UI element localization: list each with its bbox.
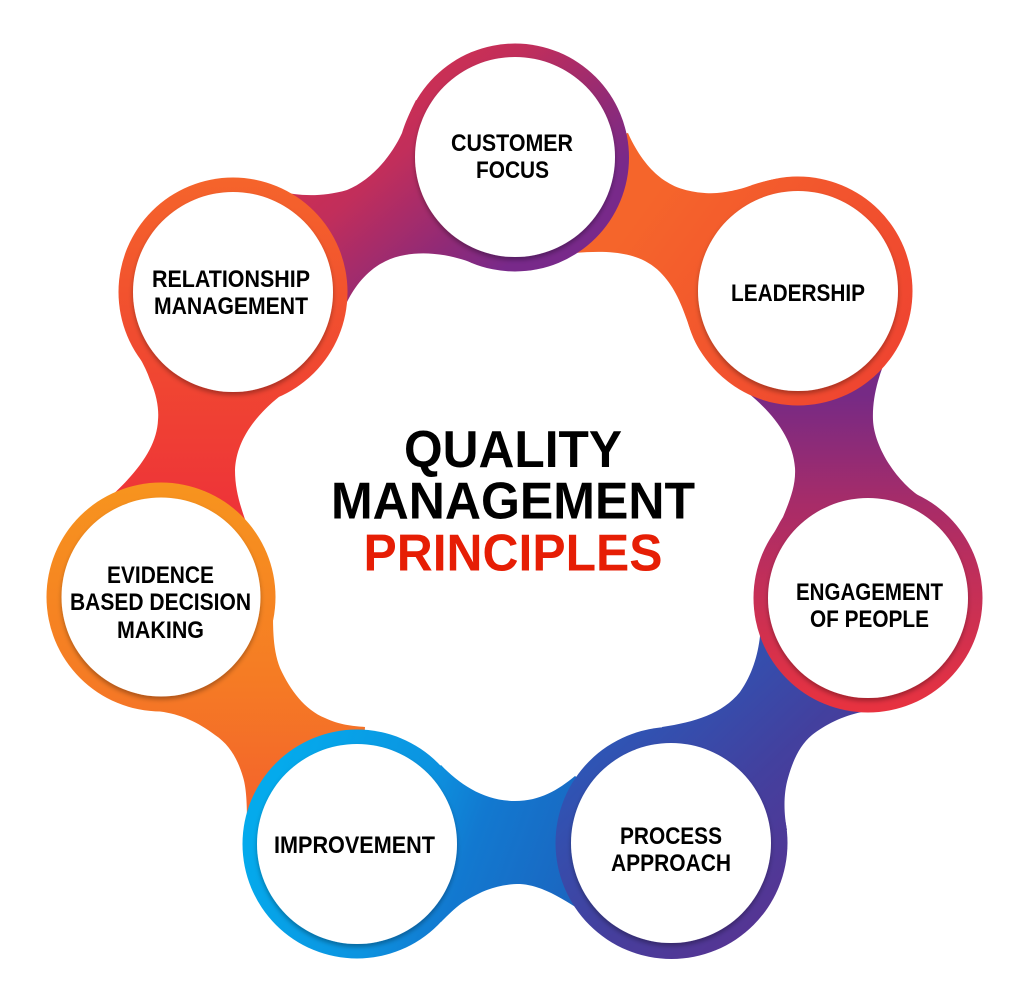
- title: PRINCIPLES: [364, 524, 662, 582]
- label: engagement of people: [796, 579, 943, 633]
- label: evidence based decision making: MAKING: [117, 617, 204, 644]
- label: relationship management: MANAGEMENT: [154, 293, 308, 320]
- label: customer focus: [451, 130, 573, 184]
- connector: leadership to engagement: [748, 291, 925, 598]
- label: leadership: LEADERSHIP: [731, 280, 865, 307]
- disc: customer focus: [415, 57, 615, 257]
- ring: relationship management: [118, 178, 348, 406]
- node: evidence based decision making: [46, 482, 276, 712]
- title: QUALITY: [404, 421, 622, 479]
- connector: relationship to customer: [233, 100, 515, 302]
- title: [331, 421, 695, 582]
- label: evidence based decision making: EVIDENCE: [107, 562, 214, 589]
- node: leadership: [684, 176, 912, 406]
- label: customer focus: CUSTOMER: [451, 130, 573, 157]
- node: customer focus: [401, 44, 629, 272]
- ring: improvement: [242, 730, 472, 958]
- label: evidence based decision making: [70, 562, 251, 644]
- label: relationship management: [152, 266, 310, 320]
- disc: improvement: [257, 744, 457, 944]
- label: customer focus: FOCUS: [476, 157, 549, 184]
- node: relationship management: [118, 178, 348, 406]
- node: process approach: [556, 727, 788, 959]
- label: relationship management: RELATIONSHIP: [152, 266, 310, 293]
- node: engagement of people: [754, 484, 982, 712]
- label: process approach: PROCESS: [620, 823, 722, 850]
- label: engagement of people: OF PEOPLE: [810, 606, 929, 633]
- ring: leadership: [684, 176, 912, 406]
- disc: evidence based decision making: [62, 498, 260, 696]
- label: improvement: IMPROVEMENT: [274, 832, 435, 859]
- ring: customer focus: [401, 44, 629, 272]
- disc: process approach: [571, 743, 771, 943]
- title: MANAGEMENT: [331, 472, 695, 530]
- label: evidence based decision making: BASED DECISION: [70, 589, 251, 616]
- disc: leadership: [698, 191, 898, 391]
- ring: process approach: [556, 727, 788, 959]
- connector: relationship to evidence: [110, 292, 318, 597]
- disc: engagement of people: [768, 498, 968, 698]
- node: improvement: [242, 730, 472, 958]
- ring: engagement of people: [754, 484, 982, 712]
- connector: engagement to process: [662, 598, 868, 843]
- label: process approach: [611, 823, 731, 877]
- connector: process to improvement: [357, 765, 671, 922]
- connector: customer to leadership: [515, 133, 798, 360]
- label: process approach: APPROACH: [611, 850, 731, 877]
- label: engagement of people: ENGAGEMENT: [796, 579, 943, 606]
- disc: relationship management: [133, 192, 333, 392]
- connector: evidence to improvement: [160, 597, 365, 844]
- ring: evidence based decision making: [46, 482, 276, 712]
